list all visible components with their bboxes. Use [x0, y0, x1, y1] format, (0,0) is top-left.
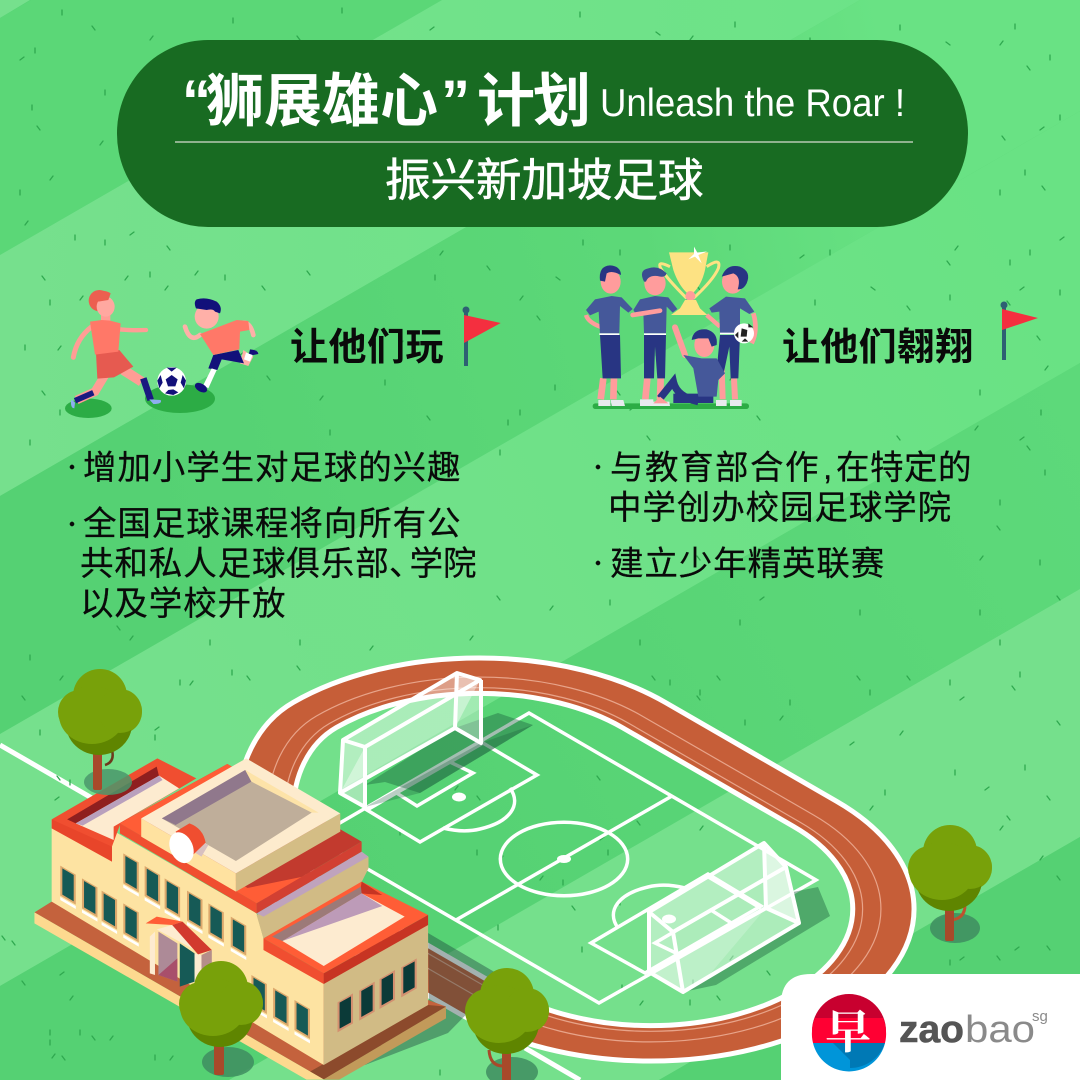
building walls — [52, 819, 428, 1065]
icon: soccer ball — [157, 367, 186, 396]
rooftop box — [141, 758, 340, 892]
tree: top left — [58, 669, 142, 795]
windows: side — [338, 958, 417, 1032]
wordmark: zaobao sg — [899, 1008, 1048, 1051]
text block: left bullets — [70, 450, 477, 623]
logo panel — [781, 974, 1080, 1080]
entrance with canopy — [146, 917, 212, 988]
central roof — [120, 764, 362, 913]
icon: football held by player — [734, 323, 754, 343]
icon: red flag left — [462, 306, 501, 366]
text block: right bullets: 与教育部合作,在特定的 — [610, 450, 972, 487]
goal: right — [649, 843, 830, 992]
school building — [34, 758, 446, 1080]
wordmark: zaobao sg: zao — [899, 1009, 964, 1051]
tree: front of school — [179, 961, 263, 1077]
text block: right bullets — [596, 450, 972, 583]
text block: left bullets: 以及学校开放 — [80, 586, 286, 623]
windows: front — [60, 853, 310, 1043]
text block: left bullets: 共和私人足球俱乐部、学院 — [80, 546, 476, 583]
text block: left bullets: 增加小学生对足球的兴趣 — [83, 450, 461, 487]
text block: right bullets: 建立少年精英联赛 — [610, 546, 885, 583]
heading: let them soar: 让他们翱翔 — [782, 327, 974, 369]
tree: bottom centre — [465, 968, 549, 1080]
icon: trophy — [660, 247, 719, 315]
illustration: team with trophy — [586, 247, 755, 409]
football pitch markings — [314, 713, 816, 1003]
illustration: two boys playing football — [65, 290, 258, 418]
heading: let them play: 让他们玩 — [290, 327, 444, 369]
title pill — [117, 40, 968, 227]
icon: round sign — [165, 823, 208, 867]
wordmark: zaobao sg: sg — [1032, 1008, 1048, 1025]
subtitle: 振兴新加坡足球 — [385, 155, 704, 206]
running track — [107, 595, 1023, 1080]
icon: zaobao logo circle: 早 — [825, 996, 871, 1062]
tree: right — [908, 825, 992, 943]
building base — [34, 902, 446, 1080]
wordmark: zaobao sg: bao — [965, 1009, 1035, 1051]
goal: left — [340, 673, 533, 807]
title: english subtitle: Unleash the Roar ! — [600, 82, 905, 125]
icon: zaobao logo circle — [812, 994, 886, 1071]
right wing roof — [263, 882, 428, 984]
icon: red flag right — [1000, 302, 1038, 360]
title: chinese heading: “狮展雄心”计划 — [182, 69, 591, 134]
left wing roof — [52, 758, 196, 862]
text block: left bullets: 全国足球课程将向所有公 — [83, 506, 461, 543]
building shadow — [324, 933, 503, 1065]
text block: right bullets: 中学创办校园足球学院 — [608, 490, 952, 527]
